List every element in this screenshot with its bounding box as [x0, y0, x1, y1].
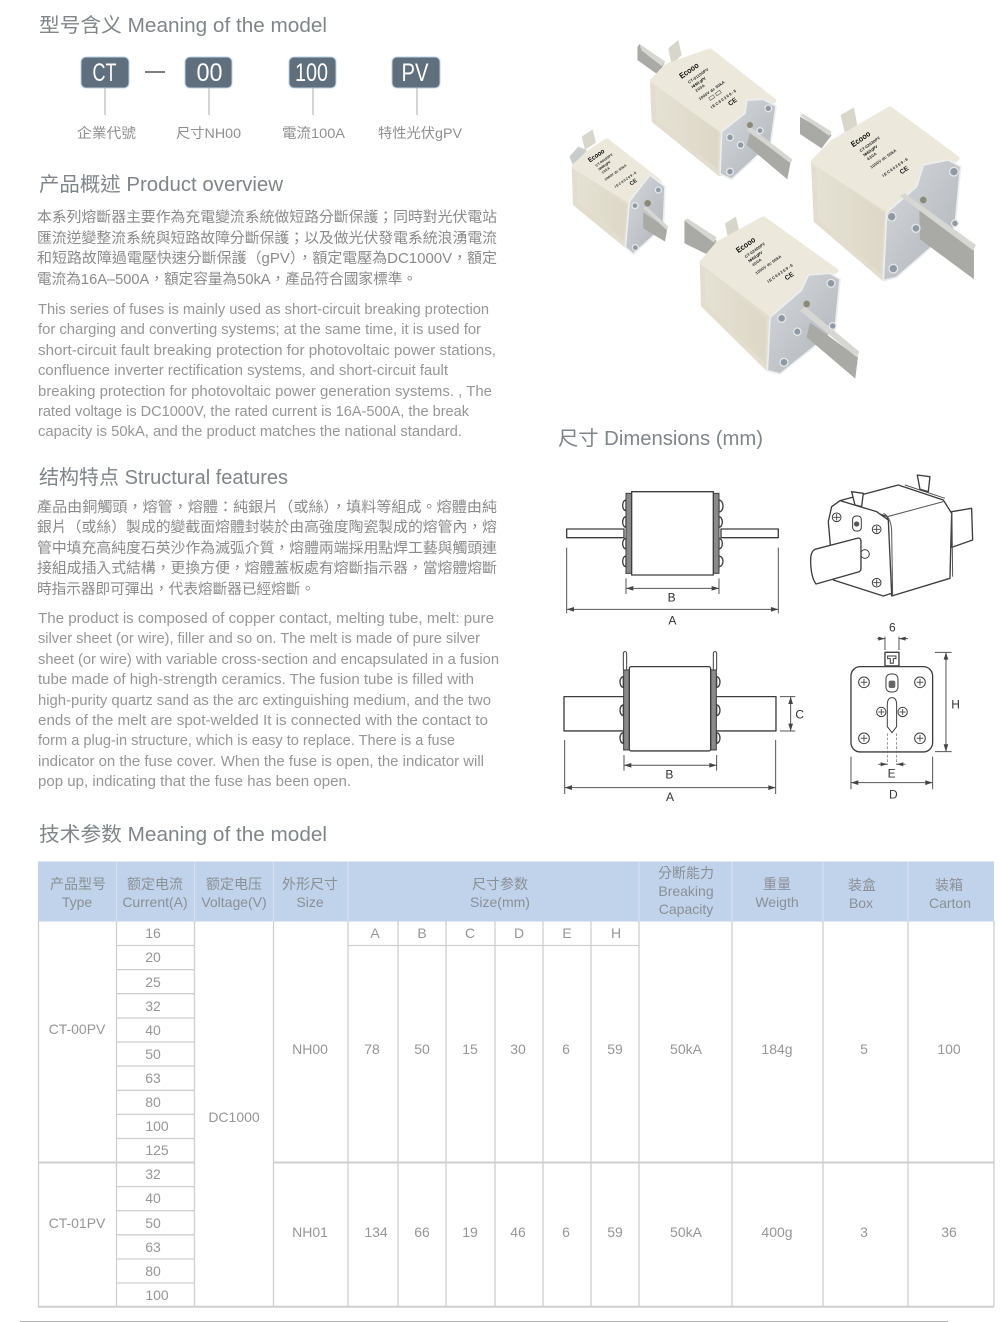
row group: CT-00PV: 5: [860, 1041, 868, 1057]
fuse label: [587, 140, 642, 199]
row group: CT-01PV: 100: [145, 1287, 169, 1303]
fuse label: IEC60269-6: [881, 156, 909, 178]
row group: CT-01PV: 59: [607, 1224, 623, 1240]
row group: CT-00PV: 20: [145, 949, 161, 965]
drawing: top view: [567, 492, 778, 627]
row group: CT-00PV: C: [465, 925, 475, 941]
row group: CT-00PV: 100: [145, 1118, 169, 1134]
table header: 装箱: [935, 877, 963, 893]
fuse label: NH00 gPV: [598, 160, 612, 171]
badge: PV: [392, 57, 440, 88]
badge: CT: [81, 57, 129, 88]
drawing: isometric: [811, 475, 973, 596]
row group: CT-00PV: 40: [145, 1022, 161, 1038]
row group: CT-00PV: 32: [145, 998, 161, 1014]
row group: CT-00PV: A: [370, 925, 380, 941]
row group: CT-00PV: 50kA: [670, 1041, 703, 1057]
table header: 额定电压: [206, 876, 262, 892]
text block: structure English: pop up, indicating that the fuse has been open.: [38, 774, 351, 790]
row group: CT-01PV: 80: [145, 1263, 161, 1279]
text block: structure English: tube made of high-strength ceramics. The fusion tube is filled with: [38, 672, 474, 688]
row group: CT-00PV: 184g: [761, 1041, 793, 1057]
row group: CT-01PV: 19: [462, 1224, 478, 1240]
text block: overview Chinese: 本系列熔斷器主要作為充電變流系統做短路分斷保護；同時對光伏電站: [37, 209, 497, 226]
fuse: right large: [800, 107, 976, 281]
label: current: 電流100A: [282, 125, 346, 141]
dimension label B: B: [668, 591, 676, 605]
table header: [38, 862, 994, 922]
row group: CT-00PV: 25: [145, 974, 161, 990]
fuse label: CE: [629, 178, 639, 187]
text block: structure Chinese: [37, 498, 498, 598]
row group: CT-01PV: 36: [941, 1224, 957, 1240]
model code diagram: [77, 57, 463, 141]
fuse label: CE: [899, 165, 911, 176]
text block: structure English: silver sheet (or wire), filler and so on. The melt is made of pure silver: [38, 631, 480, 647]
row group: CT-00PV: D: [514, 925, 524, 941]
fuse label: 630A: [866, 151, 878, 161]
row group: CT-01PV: NH01: [292, 1224, 328, 1240]
row group: CT-00PV: 6: [562, 1041, 570, 1057]
row group: CT-00PV: [49, 925, 961, 1158]
table header: 分断能力: [658, 865, 714, 881]
row group: CT-00PV: 100: [937, 1041, 961, 1057]
fuse: left small: [569, 129, 668, 254]
table header: Current(A): [122, 894, 188, 910]
row group: CT-00PV: B: [417, 925, 427, 941]
dimension label D: D: [889, 788, 898, 802]
table header: 产品型号: [50, 876, 106, 892]
row group: CT-00PV: 63: [145, 1070, 161, 1086]
text block: overview English: short-circuit fault breaking protection for photovoltaic power stations,: [38, 343, 496, 359]
row group: CT-00PV: 78: [364, 1041, 380, 1057]
label: characteristic: 特性光伏gPV: [378, 125, 463, 141]
badge: 100: 100: [295, 59, 328, 87]
text block: structure English: The product is composed of copper contact, melting tube, melt: pure: [38, 611, 494, 627]
table header: 装盒: [848, 877, 876, 893]
table header: Weigth: [755, 894, 799, 910]
text block: overview English: [38, 302, 496, 440]
footer rule: [20, 1321, 948, 1322]
row group: CT-01PV: 134: [364, 1224, 388, 1240]
table header: 外形尺寸: [282, 876, 338, 892]
table header: Size(mm): [470, 894, 530, 910]
text block: structure English: [38, 611, 499, 790]
voltage cell: DC1000: [208, 1109, 260, 1125]
fuse label: Ecooo: [678, 61, 701, 81]
heading: product overview: 产品概述 Product overview: [39, 173, 284, 196]
row group: CT-00PV: 125: [145, 1142, 169, 1158]
text block: structure English: form a plug-in structure, which is easy to replace. There is a fuse: [38, 733, 455, 749]
text block: structure Chinese: 時指示器即可彈出，代表熔斷器已經熔斷。: [37, 581, 315, 598]
row group: CT-01PV: 50: [145, 1215, 161, 1231]
text block: structure English: sheet (or wire) with variable cross-section and encapsulated in a fusion: [38, 652, 499, 668]
fuse label: IEC60269-6: [766, 262, 794, 284]
fuse label: 1000V dc 50kA: [869, 148, 897, 170]
row group: CT-00PV: 16: [145, 925, 161, 941]
row group: CT-01PV: 63: [145, 1239, 161, 1255]
text block: overview English: capacity is 50kA, and the product matches the national standard.: [38, 424, 462, 440]
fuse label: [849, 120, 915, 190]
table header: 额定电流: [127, 876, 183, 892]
dash between CT and 00: [145, 71, 165, 73]
fuse label: NH02 gPV: [747, 250, 764, 263]
fuse label: NH01 gPV: [690, 75, 707, 89]
text block: structure English: indicator on the fuse cover. When the fuse is open, the indicator will: [38, 754, 484, 770]
fuse label: 1000V dc 50kA: [698, 79, 726, 101]
drawing: front view: [564, 652, 804, 804]
heading: dimensions: 尺寸 Dimensions (mm): [558, 427, 763, 450]
row group: CT-01PV: 46: [510, 1224, 526, 1240]
dimension label A: A: [666, 790, 674, 804]
row group: CT-00PV: 50: [145, 1046, 161, 1062]
table header: Carton: [929, 895, 971, 911]
text block: overview Chinese: 電流為16A–500A，額定容量為50kA，產品符合國家標準。: [37, 270, 417, 288]
label: company code: 企業代號: [77, 125, 136, 141]
row group: CT-00PV: 15: [462, 1041, 478, 1057]
fuse label: Ecooo: [734, 235, 757, 255]
table header: Type: [62, 894, 92, 910]
fuse label: CE: [727, 96, 739, 108]
text block: overview English: confluence inverter rectification systems, and short-circuit fault: [38, 363, 448, 379]
dimension label E: E: [888, 767, 896, 781]
row group: CT-00PV: NH00: [292, 1041, 328, 1057]
fuse label: 400A: [751, 257, 763, 267]
row group: CT-01PV: CT-01PV: [49, 1215, 106, 1231]
fuse label: CT-02630PV: [859, 135, 881, 153]
dimension label 6: 6: [889, 620, 896, 634]
row group: CT-00PV: E: [562, 925, 572, 941]
fuse label: [678, 51, 743, 122]
dimension label A: A: [668, 613, 676, 627]
text block: structure Chinese: 產品由銅觸頭，熔管，熔體：純銀片（或絲），填料等組成。熔體由純: [37, 498, 497, 516]
row group: CT-00PV: CT-00PV: [49, 1021, 106, 1037]
fuse label: IEC60269-6: [614, 171, 637, 189]
table header: 重量: [763, 876, 791, 892]
table header: Size: [296, 894, 324, 910]
fuse label: Ecooo: [849, 129, 872, 149]
text block: overview Chinese: 匯流逆變整流系統與短路故障分斷保護；以及做光伏發電系統浪湧電流: [37, 229, 497, 247]
text block: overview English: This series of fuses is mainly used as short-circuit breaking protection: [38, 302, 489, 318]
dimension label B: B: [665, 768, 673, 782]
text block: structure Chinese: 銀片（或絲）製成的變截面熔體封裝於由高強度陶瓷製成的熔管內，熔: [37, 518, 497, 536]
table header: Breaking: [658, 883, 714, 899]
text block: structure Chinese: 管中填充高純度石英沙作為滅弧介質，熔體兩端採用點焊工藝與觸頭連: [37, 539, 498, 557]
fuse label: 200A: [694, 83, 706, 93]
fuse label: Ecooo: [587, 148, 606, 164]
row group: CT-01PV: 400g: [761, 1224, 793, 1240]
parameter table: [38, 862, 994, 1307]
fuse label: CT-02400PV: [744, 241, 766, 259]
fuse label: [734, 226, 800, 296]
row group: CT-00PV: 59: [607, 1041, 623, 1057]
text block: overview Chinese: [37, 209, 497, 288]
text block: structure English: high-purity quartz sand as the arc extinguishing medium, and the two: [38, 693, 491, 709]
text block: overview English: for charging and converting systems; at the same time, it is used for: [38, 322, 481, 338]
row group: CT-01PV: 6: [562, 1224, 570, 1240]
text block: overview Chinese: 和短路故障過電壓快速分斷保護（gPV），額定電壓為DC1000V，額定: [37, 249, 497, 267]
fuse label: 1000V dc 50kA: [754, 254, 782, 276]
fuse label: IEC60269-6: [710, 88, 738, 110]
fuse: top: [637, 40, 792, 179]
fuse label: 100A: [601, 166, 611, 175]
row group: CT-01PV: 32: [145, 1166, 161, 1182]
text block: structure English: ends of the melt are spot-welded It is connected with the contact to: [38, 713, 488, 729]
table header: 尺寸参数: [472, 876, 528, 892]
row group: CT-01PV: 50kA: [670, 1224, 703, 1240]
dimension label C: C: [795, 707, 804, 721]
product photo: four fuses: [569, 40, 976, 379]
row group: CT-00PV: H: [611, 925, 621, 941]
text block: structure Chinese: 接組成插入式結構，更換方便，熔體蓋板處有熔斷指示器，當熔體熔斷: [37, 560, 497, 577]
row group: CT-01PV: 40: [145, 1190, 161, 1206]
text block: overview English: rated voltage is DC1000V, the rated current is 16A-500A, the break: [38, 404, 470, 420]
fuse label: CT-01100PV: [687, 67, 710, 85]
text block: overview English: breaking protection for photovoltaic power generation systems. , The: [38, 384, 492, 400]
row group: CT-00PV: 50: [414, 1041, 430, 1057]
row group: CT-01PV: [49, 1166, 957, 1303]
drawing: end view: [851, 620, 960, 802]
fuse: bottom: [684, 217, 859, 379]
dimension label H: H: [951, 697, 960, 711]
table grid: [38, 921, 994, 1306]
dimension drawings: [564, 475, 973, 804]
badge: 00: [185, 57, 232, 88]
heading: technical parameters: 技术参数 Meaning of the model: [39, 823, 327, 846]
fuse label: CE: [784, 271, 796, 282]
badge: CT: CT: [92, 59, 116, 87]
table header: Capacity: [659, 901, 713, 917]
label: size: 尺寸NH00: [176, 125, 241, 141]
fuse label: CT-00100PV: [595, 152, 614, 168]
fuse label: NH03 gPV: [862, 144, 879, 158]
fuse label: 1000V dc 50kA: [604, 163, 628, 182]
heading: structural features: 结构特点 Structural features: [39, 466, 288, 489]
badge: PV: PV: [402, 59, 429, 87]
row group: CT-00PV: 30: [510, 1041, 526, 1057]
row group: CT-00PV: 80: [145, 1094, 161, 1110]
table header: Voltage(V): [201, 894, 267, 910]
row group: CT-01PV: 66: [414, 1224, 430, 1240]
connector lines: [105, 88, 417, 115]
row group: CT-01PV: 3: [860, 1224, 868, 1240]
table header: Box: [849, 895, 873, 911]
badge: 00: 00: [196, 59, 222, 87]
heading: meaning of the model: 型号含义 Meaning of the model: [39, 14, 327, 37]
